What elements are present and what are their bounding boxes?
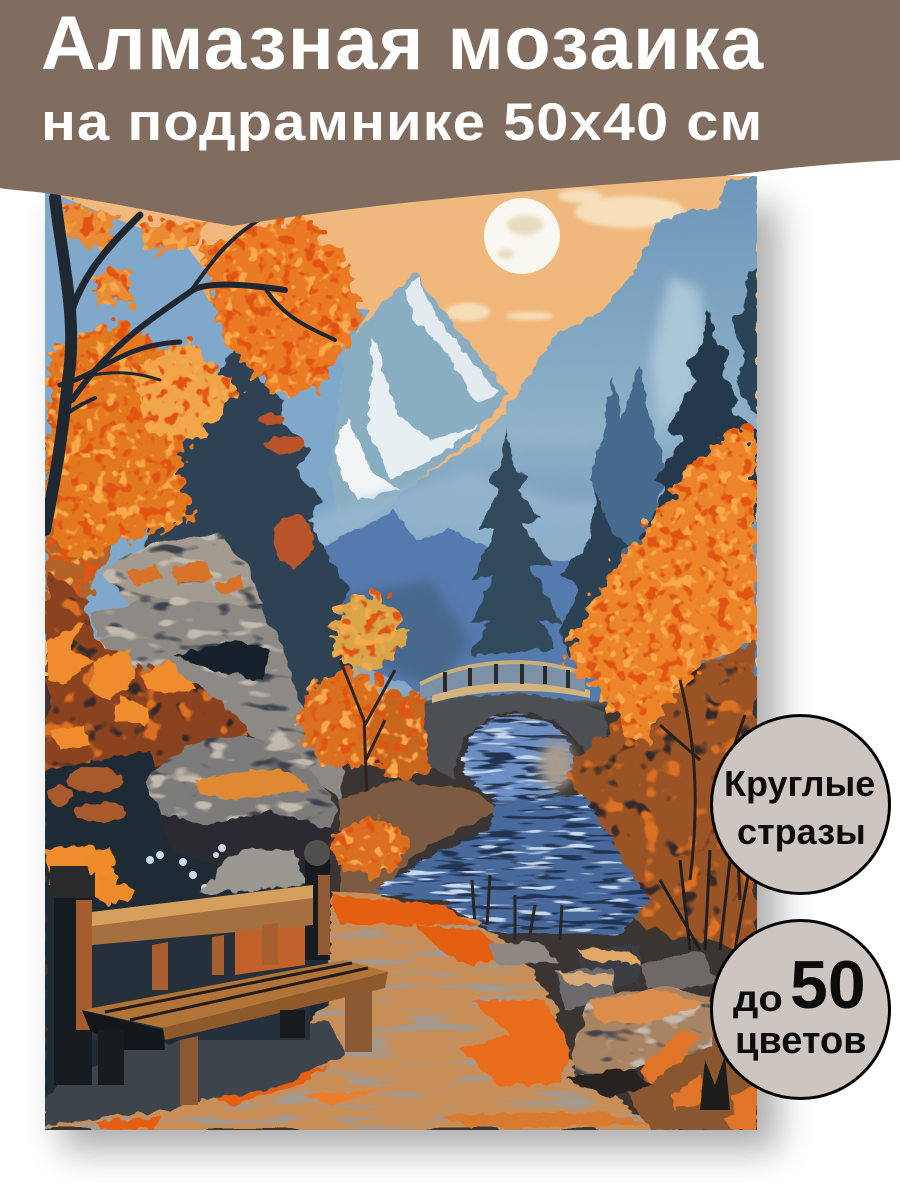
conifer: right edge (732, 268, 757, 420)
bench (50, 840, 388, 1105)
rock top orange moss (125, 560, 245, 595)
bench seat (82, 960, 388, 1028)
clouds (446, 189, 685, 321)
badge: up to 50 colours (710, 919, 891, 1100)
left bank (340, 780, 500, 895)
rock bottom shadow (160, 810, 335, 870)
right tree branches (660, 680, 745, 900)
conifer: centre (470, 430, 562, 655)
bench left post lit side (76, 900, 92, 1030)
rust leaves on dark ground (48, 767, 126, 822)
bench right post lit side (318, 875, 330, 955)
canvas base colour (45, 676, 757, 1130)
fallen leaves on path (95, 895, 650, 1130)
badge: up to 50 colours: цветов (735, 1020, 867, 1062)
centre tree trunk (340, 660, 395, 825)
left blue backdrop (45, 190, 370, 640)
bench underside (82, 1010, 165, 1050)
rock: middle (88, 597, 345, 800)
big foreground rock (570, 985, 715, 1078)
valley lower shade (330, 580, 470, 690)
bridge rail top (420, 662, 585, 684)
bench seat front (163, 972, 388, 1040)
conifers (470, 268, 757, 660)
header banner (0, 0, 900, 226)
river (375, 795, 650, 935)
orange bush behind centre tree (300, 670, 438, 781)
big rock orange (590, 990, 705, 1025)
left brown foliage (45, 570, 255, 790)
orange sprigs on dark conifer (256, 414, 313, 566)
conifer: faded back (590, 366, 666, 563)
bridge deck (432, 682, 590, 703)
bridge balusters (445, 664, 568, 692)
right lower plant base (625, 1010, 757, 1130)
orange maple sprays (45, 620, 195, 905)
rocks left (88, 535, 345, 800)
bench back rail (92, 885, 313, 945)
bridge arch (425, 695, 612, 790)
dark grass tuft (700, 1055, 730, 1110)
badge: round rhinestones: Круглые (724, 763, 875, 804)
bench left post (54, 880, 92, 1085)
conifer: right lower (558, 489, 628, 660)
badge: round rhinestones: стразы (737, 811, 866, 852)
rock behind bench (200, 848, 305, 895)
bench right post (305, 860, 330, 960)
left tree foliage (45, 200, 360, 620)
orange plants (640, 1030, 757, 1130)
bench leaves (85, 848, 135, 905)
centre tree crown (331, 594, 403, 670)
foliage: yellow bridge (130, 340, 240, 440)
flowers (146, 844, 226, 892)
right mountains (348, 176, 757, 700)
rock cave shadow (175, 640, 270, 680)
bench slats (152, 923, 278, 990)
dark conifer left (140, 340, 355, 720)
badge: up to 50 colours: до (733, 978, 783, 1019)
haze in bridge opening (538, 741, 574, 789)
bench post knob (304, 840, 330, 866)
bridge railing (420, 660, 585, 700)
water under bridge (464, 714, 572, 802)
right bank and brown foliage (570, 640, 757, 950)
title: first line: Алмазная мозаика (41, 1, 765, 86)
foliage: left low cluster (45, 320, 210, 560)
reeds by the path (472, 875, 562, 940)
foliage: low edge brown (45, 443, 112, 601)
rock: bottom (146, 735, 338, 829)
orange grass (332, 820, 408, 876)
bench seat lines (105, 963, 368, 1020)
painting scene (45, 176, 757, 1130)
bench orange gap (235, 915, 305, 975)
foliage: top right cluster (200, 215, 360, 395)
far forest (324, 508, 608, 702)
mountain light face (650, 275, 706, 430)
conifer: tall right (640, 308, 757, 560)
right tree orange crown (562, 428, 757, 745)
badge: up to 50 colours: 50 (790, 947, 866, 1023)
bench rail highlight (92, 885, 313, 926)
foreground rocks (488, 940, 720, 1010)
dark shadow under big rock (565, 1068, 650, 1098)
bench backdrop (92, 915, 310, 1040)
left tree branches (45, 198, 335, 530)
canvas shadow (62, 205, 778, 1150)
bridge (420, 660, 612, 790)
dark grass right (660, 850, 750, 950)
snowy peak (330, 272, 510, 540)
title: second line: на подрамнике 50х40 см (41, 93, 763, 152)
badge: round rhinestones (710, 714, 891, 895)
ground shade under bench (45, 1020, 345, 1125)
path (45, 892, 690, 1130)
rock bottom orange moss (195, 770, 310, 800)
valley haze (300, 470, 640, 700)
sky (45, 176, 757, 676)
bench post cap (50, 866, 95, 898)
left lower dark undergrowth (45, 750, 330, 1095)
bench legs (180, 982, 372, 1105)
moon (484, 198, 560, 274)
foliage: top sprays (60, 200, 210, 305)
rock: top (100, 535, 262, 612)
